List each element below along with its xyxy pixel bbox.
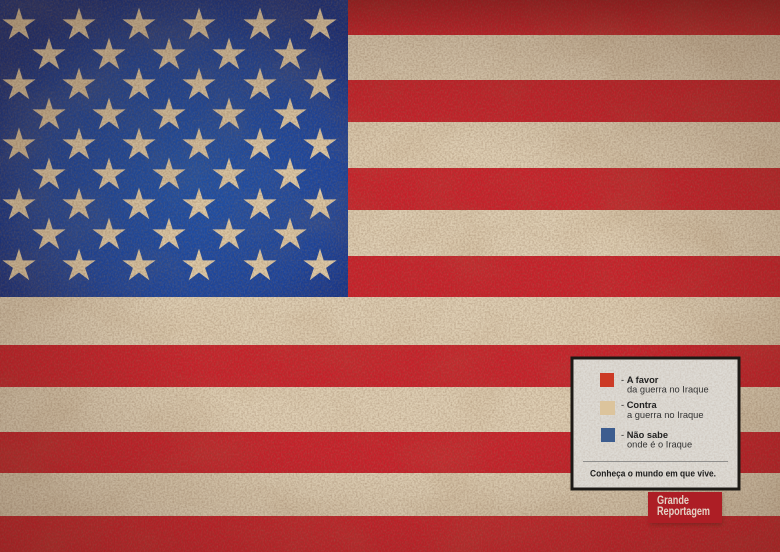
legend item: a favor: da guerra no Iraque: [627, 384, 709, 394]
label tag: Grande Reportagem: [648, 492, 722, 525]
legend item: contra: [600, 400, 704, 420]
legend item: não sabe: onde é o Iraque: [627, 440, 692, 450]
panel: legend card: [572, 358, 739, 489]
legend item: a favor: [600, 373, 709, 394]
label tag: Grande Reportagem: Reportagem: [657, 506, 710, 518]
stars: [2, 8, 337, 280]
legend item: contra: - Contra: [621, 400, 657, 410]
legend item: a favor: - A favor: [621, 375, 659, 385]
slogan: Conheça o mundo em que vive.: [590, 468, 716, 478]
panel: blue canton with stars: [0, 0, 348, 297]
legend item: não sabe: - Não sabe: [621, 430, 668, 440]
label tag: Grande Reportagem: Grande: [657, 495, 689, 507]
legend item: não sabe: [601, 428, 692, 450]
legend item: contra: a guerra no Iraque: [627, 410, 704, 420]
